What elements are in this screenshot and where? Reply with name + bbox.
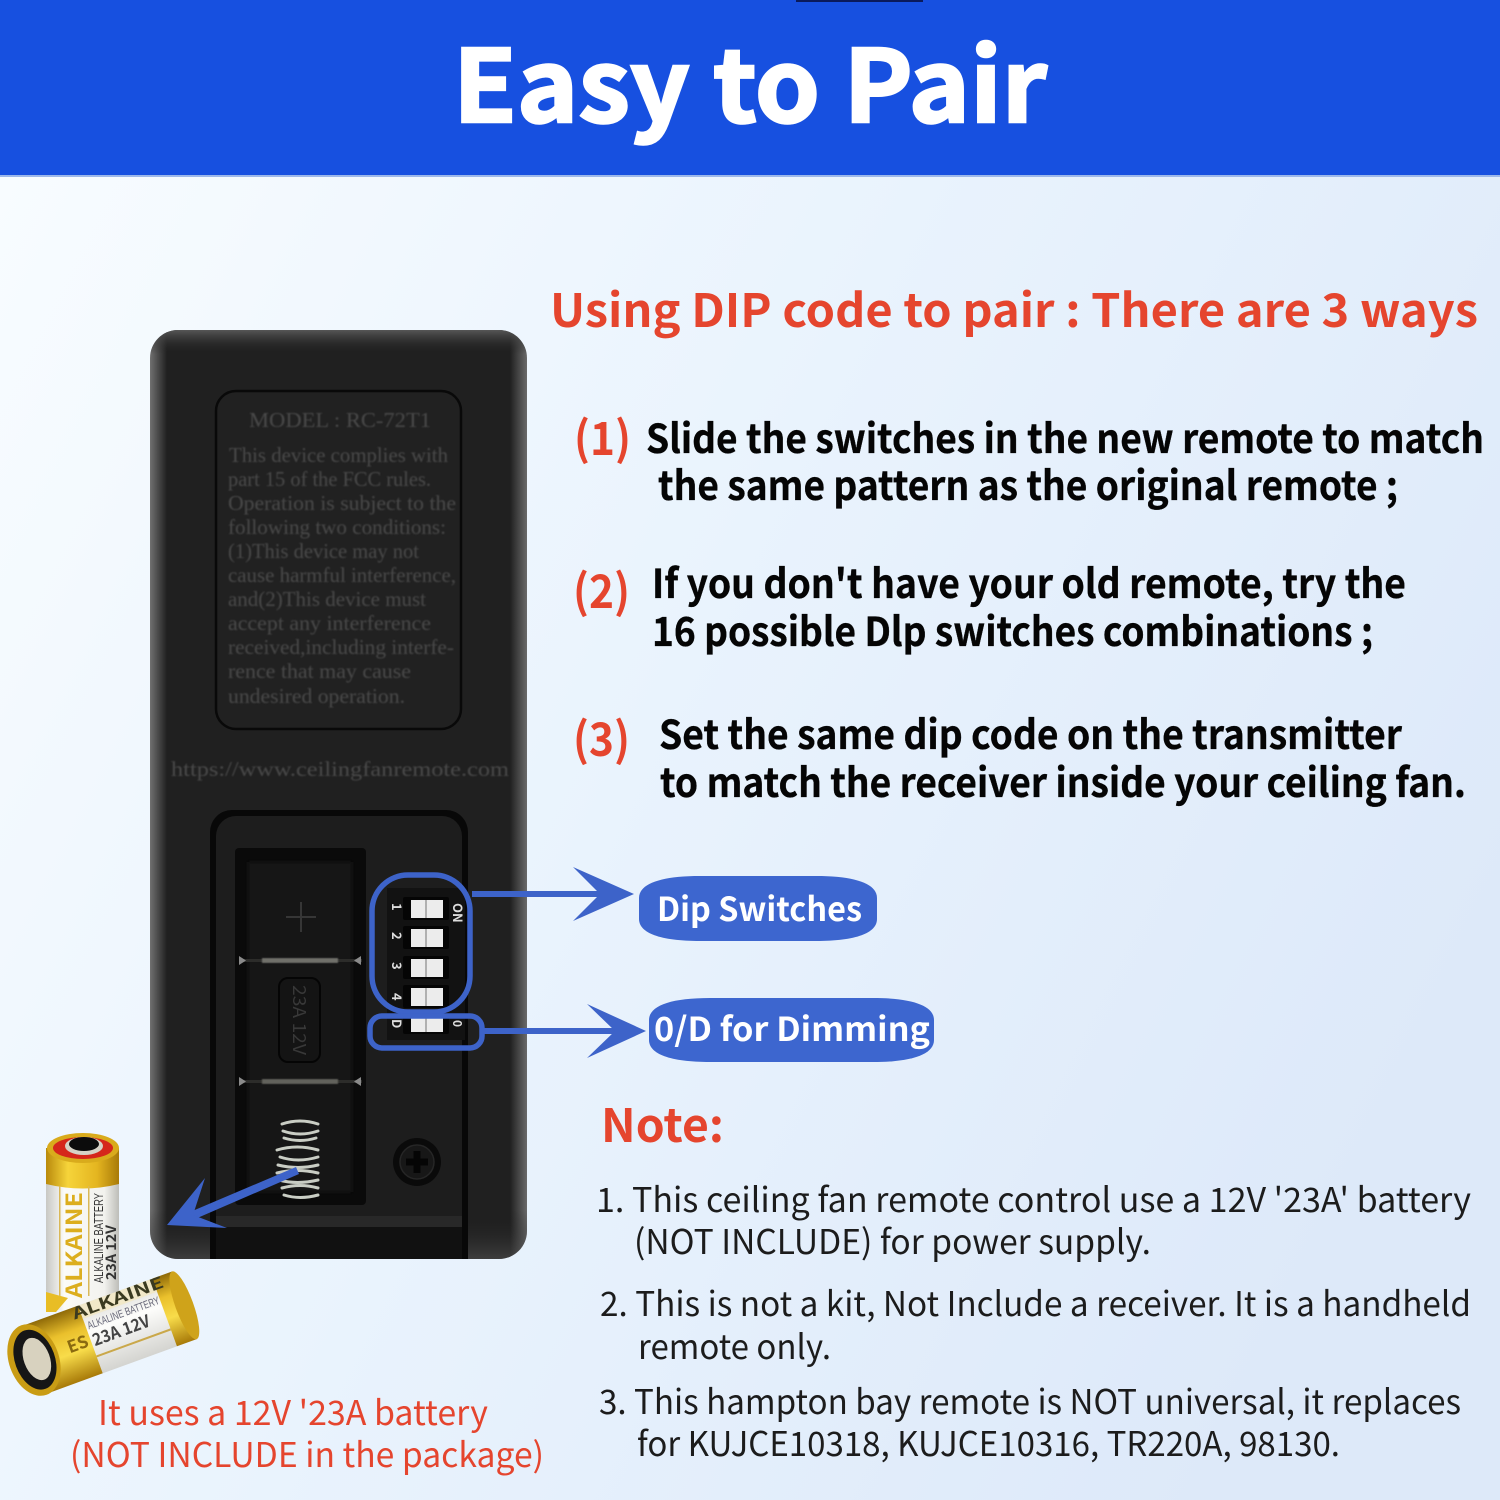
battery caption — [70, 1386, 544, 1477]
label panel: following two conditions: — [228, 515, 446, 539]
arrow: dip switches — [472, 867, 634, 921]
dip switch block: 4 — [388, 993, 407, 1001]
step 1: the same pattern as the original remote ; — [658, 454, 1398, 512]
icon: lying battery: ALKALINE BATTERY — [86, 1295, 162, 1332]
icon: lying battery: 23A 12V — [88, 1307, 153, 1351]
callout: dimming: 0/D for Dimming — [654, 1003, 930, 1051]
icon: lying battery — [0, 1262, 205, 1403]
icon: upright battery — [46, 1133, 121, 1312]
step 2: (2) — [573, 556, 630, 622]
battery caption: (NOT INCLUDE in the package) — [70, 1428, 544, 1477]
note 1: 1. This ceiling fan remote control use a 12V '23A' battery — [596, 1173, 1471, 1222]
battery cavity: 23A 12V — [287, 985, 313, 1056]
label panel: (1)This device may not — [228, 539, 419, 563]
label panel: MODEL : RC-72T1 — [249, 408, 431, 432]
label panel: rence that may cause — [228, 659, 411, 683]
label panel: and(2)This device must — [228, 587, 426, 611]
note heading: Note: — [601, 1090, 724, 1156]
step 3: (3) — [573, 704, 630, 770]
icon: upright battery: ALKAINE — [57, 1192, 89, 1299]
battery compartment — [210, 810, 468, 1259]
heading: using DIP code: Using DIP code to pair : There are 3 ways — [550, 275, 1478, 341]
dip switch block: 2 — [388, 932, 407, 940]
note 3: for KUJCE10318, KUJCE10316, TR220A, 98130. — [637, 1417, 1340, 1466]
dip switch block: ON — [449, 903, 468, 923]
battery caption: It uses a 12V '23A battery — [98, 1386, 488, 1435]
label panel — [216, 391, 461, 729]
remote control back — [150, 330, 527, 1259]
title: Easy to Pair — [453, 6, 1047, 151]
step 2: If you don't have your old remote, try the — [652, 552, 1406, 610]
arrow: to battery — [167, 1167, 299, 1228]
step 3: Set the same dip code on the transmitter — [659, 703, 1403, 761]
label panel: accept any interference — [228, 611, 431, 635]
header banner — [0, 0, 1500, 177]
label panel: undesired operation. — [228, 684, 405, 708]
dip switch block — [387, 888, 468, 1040]
icon: screw — [393, 1138, 441, 1186]
dip switch block: 3 — [388, 962, 407, 970]
note 1: (NOT INCLUDE) for power supply. — [634, 1215, 1151, 1264]
icon: upright battery: ALKALINE BATTERY — [91, 1193, 106, 1283]
step 3 — [573, 703, 1466, 809]
icon: lying battery: ALKAINE — [67, 1269, 167, 1325]
label panel: This device complies with — [229, 443, 448, 467]
icon: spring — [277, 1121, 318, 1198]
note 1 — [596, 1173, 1471, 1264]
label panel: Operation is subject to the — [228, 491, 456, 515]
note 2 — [600, 1277, 1471, 1369]
dip switch block: D — [388, 1019, 407, 1028]
callout: dimming — [649, 998, 934, 1062]
note 2: remote only. — [638, 1320, 831, 1369]
highlight: dimming outline — [370, 1016, 482, 1048]
note 3: 3. This hampton bay remote is NOT universal, it replaces — [599, 1375, 1461, 1424]
icon: upright battery: 23A 12V — [101, 1225, 121, 1280]
callout: dip switches: Dip Switches — [657, 883, 862, 931]
step 1: (1) — [574, 403, 631, 469]
website url: https://www.ceilingfanremote.com — [171, 757, 509, 781]
dip switch block: 0 — [449, 1020, 466, 1027]
battery cavity — [235, 848, 366, 1205]
label panel: part 15 of the FCC rules. — [228, 467, 431, 491]
step 2: 16 possible Dlp switches combinations ; — [652, 600, 1373, 658]
step 2 — [573, 552, 1406, 658]
icon: lying battery: ES — [63, 1327, 91, 1358]
dip switch block: 1 — [388, 903, 407, 911]
label panel: received,including interfe- — [228, 635, 454, 659]
callout: dip switches — [639, 876, 877, 941]
note 2: 2. This is not a kit, Not Include a receiver. It is a handheld — [600, 1277, 1471, 1326]
highlight: dip switches outline — [372, 875, 470, 1012]
arrow: dimming — [484, 1004, 646, 1058]
note 3 — [599, 1375, 1461, 1466]
step 1 — [574, 403, 1484, 512]
label panel: cause harmful interference, — [228, 563, 456, 587]
